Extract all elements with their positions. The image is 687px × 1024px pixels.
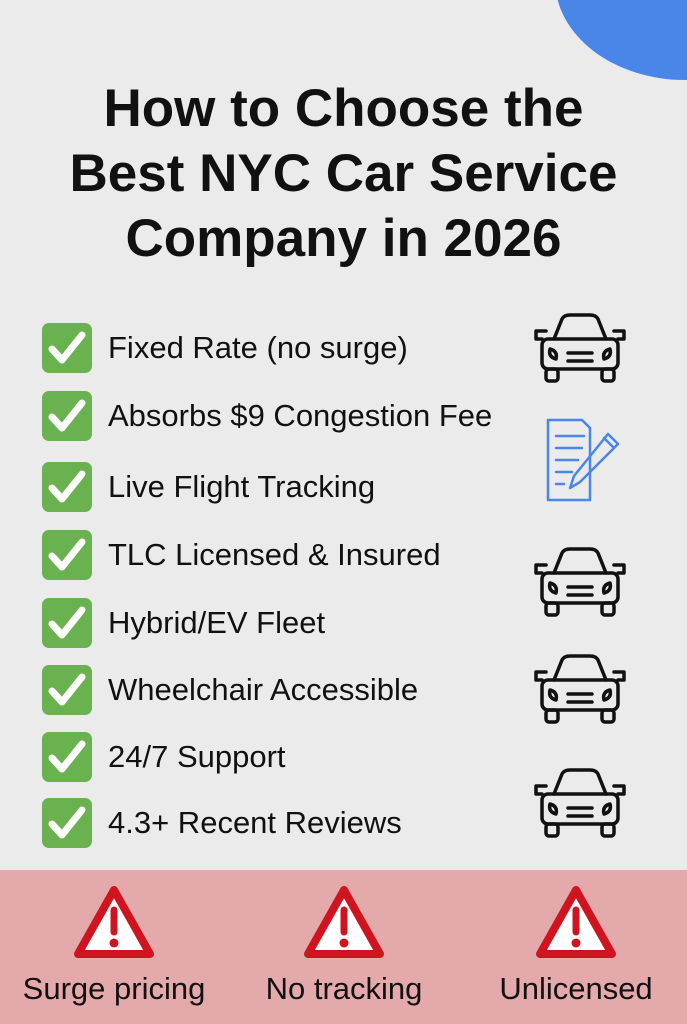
item: flight tracking: Live Flight Tracking [108,469,375,504]
warning: surge pricing: Surge pricing [23,971,205,1006]
item: hybrid fleet: Hybrid/EV Fleet [108,605,325,640]
item: support: 24/7 Support [108,739,286,774]
warning: no tracking [266,886,422,1006]
icon: car 3 [536,656,624,722]
warning: unlicensed [499,886,653,1006]
item: fixed rate: Fixed Rate (no surge) [108,330,408,365]
icon: car 4 [536,770,624,836]
icon: document with pen [548,420,618,500]
item: fixed rate [42,323,408,373]
item: flight tracking [42,462,375,512]
icon: car 2 [536,549,624,615]
item: congestion fee [42,391,492,441]
item: congestion fee: Absorbs $9 Congestion Fee [108,398,492,433]
item: wheelchair: Wheelchair Accessible [108,672,418,707]
title [70,79,617,268]
title: Best NYC Car Service [70,144,617,203]
warning panel [0,870,687,1024]
item: reviews: 4.3+ Recent Reviews [108,805,402,840]
item: wheelchair [42,665,418,715]
title: How to Choose the [104,79,583,138]
checklist [42,323,492,848]
item: support [42,732,286,782]
warning: no tracking: No tracking [266,971,422,1006]
icon: car 1 [536,315,624,381]
title: Company in 2026 [126,209,561,268]
decorative blue circle [555,0,687,80]
warning: surge pricing [23,886,205,1006]
item: TLC licensed: TLC Licensed & Insured [108,537,441,572]
warning: unlicensed: Unlicensed [499,971,653,1006]
item: hybrid fleet [42,598,325,648]
item: reviews [42,798,402,848]
item: TLC licensed [42,530,441,580]
